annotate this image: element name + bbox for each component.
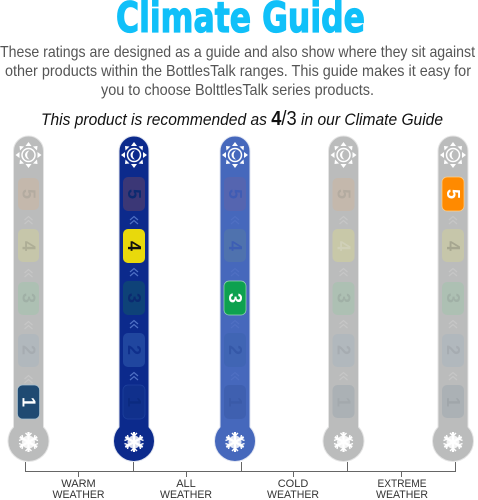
scale cell 2 (442, 334, 464, 367)
scale cell 5: 5 (334, 189, 354, 199)
recommendation line: This product is recommended as 4/3 in our Climate Guide (41, 108, 443, 130)
scale cell 1 (442, 385, 464, 418)
active cell 4: 4 (124, 241, 144, 251)
scale cell 2: 2 (124, 345, 144, 355)
scale cell 1: 1 (443, 397, 463, 407)
icon: snowflake (19, 432, 38, 452)
icon: snowflake (444, 432, 462, 452)
chevrons (231, 216, 239, 380)
icon: sun (440, 142, 466, 168)
icon: sun (16, 142, 42, 168)
scale cell 2 (123, 333, 145, 367)
label: extreme weather (376, 478, 428, 500)
chevrons (340, 216, 348, 380)
chevrons (24, 216, 32, 383)
scale cell 4 (18, 229, 39, 262)
scale cell 3 (332, 282, 354, 315)
scale cell 2 (224, 333, 246, 367)
intro text (0, 44, 475, 99)
scale cell 5 (224, 177, 246, 211)
thermometer: cold weather, rating 3 (214, 136, 256, 461)
label: cold weather: COLD (278, 478, 308, 490)
active cell 5 (442, 177, 464, 211)
scale cell 3: 3 (334, 293, 354, 303)
chevrons (449, 216, 457, 380)
icon: sun (330, 142, 356, 168)
active cell 3 (224, 281, 246, 315)
scale cell 2: 2 (334, 345, 354, 355)
scale cell 4: 4 (334, 241, 354, 251)
icon: snowflake (334, 432, 353, 452)
scale cell 1 (123, 385, 145, 419)
label: all weather (160, 478, 212, 500)
scale cell 5: 5 (18, 189, 38, 199)
scale cell 3 (442, 282, 464, 315)
scale cell 3: 3 (124, 293, 144, 303)
thermometer: inactive (323, 136, 364, 461)
label: warm weather: WARM (61, 478, 96, 490)
label: all weather: ALL (176, 478, 196, 490)
scale cell 5 (332, 178, 354, 211)
scale cell 5 (18, 178, 39, 210)
scale cell 5: 5 (124, 189, 144, 199)
scale cell 3 (18, 282, 39, 315)
icon: snowflake (124, 432, 144, 452)
scale cell 5 (123, 177, 145, 211)
bracket connector (26, 462, 456, 477)
icon: snowflake (226, 432, 244, 452)
thermometer: all-weather, rating 4 (114, 136, 154, 461)
scale cell 4 (332, 229, 354, 262)
scale cell 5: 5 (225, 189, 245, 199)
scale cell 2 (18, 334, 39, 367)
chevrons (130, 216, 138, 380)
scale cell 1 (224, 385, 246, 419)
active cell 3: 3 (225, 293, 245, 303)
icon: sun (121, 142, 147, 168)
thermometer: warm weather, rating 1 (8, 136, 49, 461)
intro text: you to choose BolttlesTalk series products. (101, 82, 374, 99)
scale cell 3: 3 (443, 293, 463, 303)
scale cell 1: 1 (124, 397, 144, 407)
scale cell 1: 1 (225, 397, 245, 407)
scale cell 1 (332, 385, 354, 418)
label: extreme weather: EXTREME (378, 478, 426, 490)
scale cell 4: 4 (18, 241, 38, 251)
active cell 4 (123, 229, 145, 263)
active cell 5: 5 (443, 189, 463, 199)
scale cell 4 (442, 229, 464, 262)
scale cell 4: 4 (443, 241, 463, 251)
scale cell 4 (224, 229, 246, 262)
label: cold weather (267, 478, 319, 500)
scale cell 3 (123, 281, 145, 315)
scale cell 3: 3 (18, 293, 38, 303)
scale cell 1: 1 (334, 397, 354, 407)
scale cell 2: 2 (18, 345, 38, 355)
scale cell 2: 2 (225, 345, 245, 355)
scale cell 2: 2 (443, 345, 463, 355)
scale cell 2 (332, 334, 354, 367)
active cell 1: 1 (18, 397, 38, 407)
label: warm weather (52, 478, 105, 500)
scale cell 4: 4 (225, 241, 245, 251)
active cell 1 (18, 385, 40, 419)
thermometer: extreme weather, rating 5 (432, 136, 474, 461)
icon: sun (222, 142, 248, 168)
